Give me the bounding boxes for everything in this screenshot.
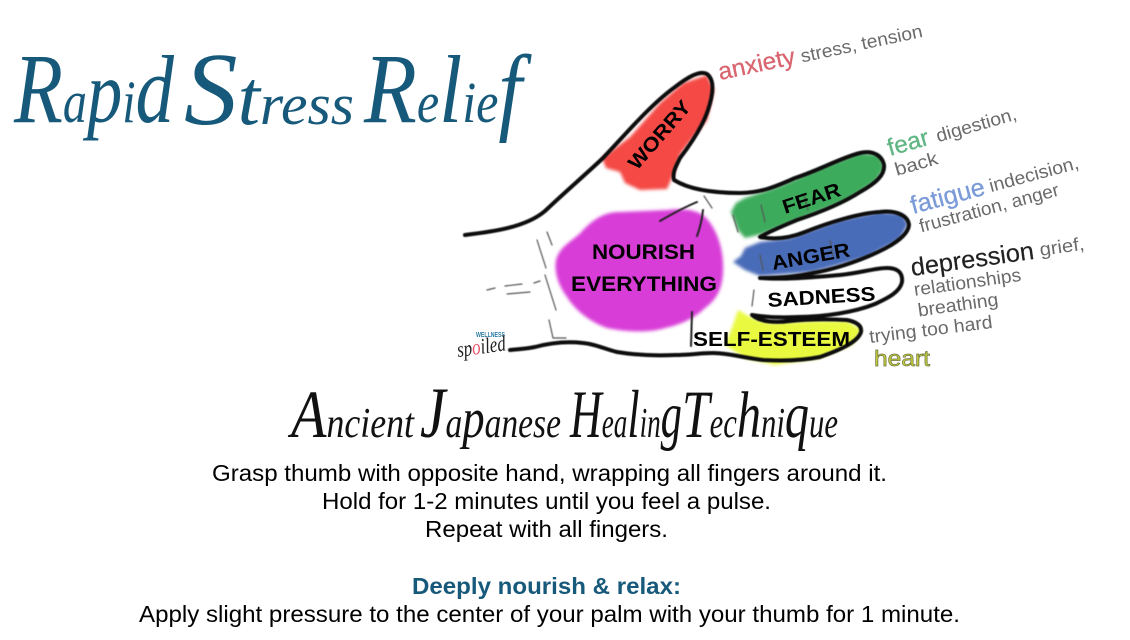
side note: depression: depression [909, 237, 1036, 282]
blob: self-esteem finger [725, 310, 862, 365]
label: sadness: SADNESS [767, 283, 876, 312]
palm instruction: Apply slight pressure to the center of your palm with your thumb for 1 minute. [139, 601, 960, 627]
logo: wellness spoiled: WELLNESS [476, 330, 505, 339]
side note: heart: heart [874, 346, 930, 371]
blob: nourish palm [555, 209, 723, 331]
subtitle [288, 373, 838, 453]
side note: anxiety: anxiety [716, 43, 798, 86]
label: anger: ANGER [770, 239, 852, 275]
logo: wellness spoiled: spoiled [455, 330, 508, 362]
side note: depression: relationships [912, 264, 1022, 300]
label: fear: FEAR [780, 179, 844, 219]
title: Relief [363, 33, 532, 144]
side note: depression: breathing [916, 288, 999, 320]
subtitle: Japanese [420, 373, 561, 453]
subtitle: Technique [682, 376, 838, 452]
side note: fear [884, 99, 1025, 180]
side note: fear: digestion, [933, 103, 1019, 146]
label: worry: WORRY [624, 96, 696, 174]
title: Stress [184, 32, 354, 147]
creases on palm and wrist [487, 195, 833, 346]
hand diagram [465, 73, 909, 365]
blob: worry thumb [602, 75, 714, 190]
heading: deeply nourish: Deeply nourish & relax: [412, 573, 681, 599]
blob: anger finger [733, 212, 908, 276]
side note: depression: grief, [1038, 233, 1086, 260]
side note: fear: fear [884, 124, 932, 162]
side note: anxiety: stress, tension [799, 20, 924, 66]
label: everything: EVERYTHING [571, 272, 717, 296]
outline: wrist and thumb [465, 73, 909, 361]
side note: depression [909, 230, 1092, 321]
side note: fatigue: frustration, anger [917, 179, 1061, 236]
label: nourish: NOURISH [592, 240, 695, 264]
instructions: Hold for 1-2 minutes until you feel a pulse. [322, 488, 771, 514]
side note: fatigue [907, 148, 1086, 237]
side note: fatigue: fatigue [907, 173, 988, 220]
instructions: Repeat with all fingers. [425, 516, 668, 542]
side note: fatigue: indecision, [987, 152, 1081, 196]
subtitle: Healing [569, 376, 682, 452]
side note: trying too hard: trying too hard [868, 311, 994, 347]
blob: fear finger [731, 153, 884, 238]
instructions [212, 460, 887, 542]
label: self-esteem: SELF-ESTEEM [693, 328, 850, 351]
side note: fear: back [892, 147, 941, 180]
instructions: Grasp thumb with opposite hand, wrapping all fingers around it. [212, 460, 887, 486]
title [13, 32, 532, 147]
title: Rapid [13, 33, 175, 144]
side note: anxiety [716, 16, 925, 86]
subtitle: Ancient [288, 376, 415, 452]
